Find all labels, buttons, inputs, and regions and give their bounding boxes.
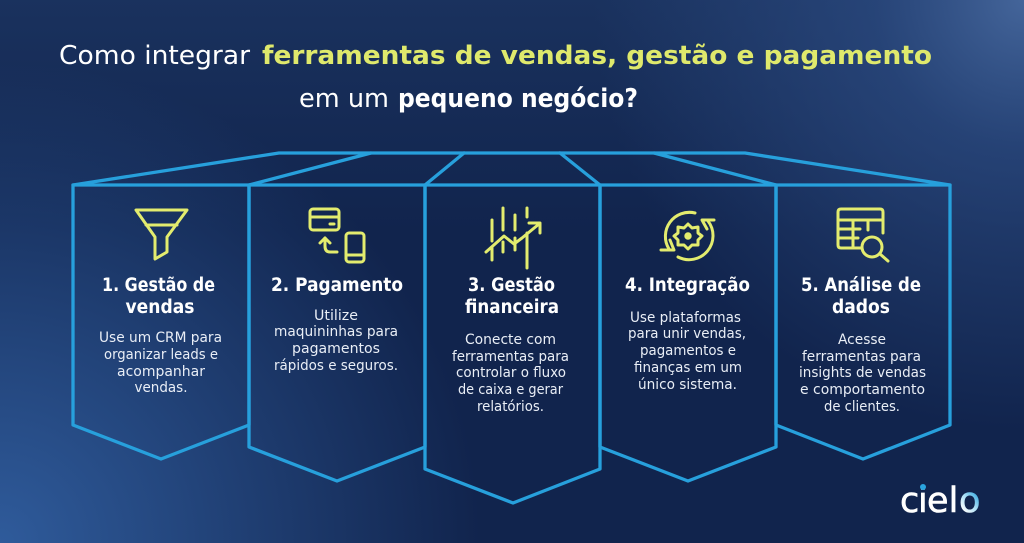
icon: sync gear <box>661 212 714 260</box>
heading: 1: vendas <box>126 297 194 318</box>
text: 5: Acesse <box>838 332 886 348</box>
heading: 5: dados <box>832 297 890 318</box>
text: 2: rápidos e seguros. <box>274 358 398 374</box>
heading: 4: 4. Integração <box>625 275 750 296</box>
text: 5: ferramentas para <box>802 349 921 365</box>
icon: card and phone <box>310 209 364 262</box>
title: em um <box>299 84 389 114</box>
heading: 3: financeira <box>465 297 559 318</box>
title: pequeno negócio? <box>398 84 638 114</box>
panel: 2 Pagamento <box>249 185 425 481</box>
text: 3: ferramentas para <box>452 349 569 365</box>
heading: 2: 2. Pagamento <box>271 275 403 296</box>
heading: 5 <box>801 275 921 318</box>
title: ferramentas de vendas, gestão e pagamento <box>262 41 932 71</box>
text: 3: relatórios. <box>477 399 544 415</box>
text: 5: de clientes. <box>824 399 900 415</box>
text: 1: organizar leads e <box>104 347 218 363</box>
text: 4: pagamentos e <box>640 343 736 359</box>
text: 1 <box>99 330 222 396</box>
text: 2: Utilize <box>314 308 358 324</box>
text: 5: insights de vendas <box>799 365 926 381</box>
icon: funnel <box>136 210 187 259</box>
roof outline connecting the five columns <box>73 153 950 185</box>
text: 3: controlar o fluxo <box>456 365 566 381</box>
text: 2: maquininhas para <box>274 324 398 340</box>
text: 4: único sistema. <box>638 377 737 393</box>
text: 3 <box>452 332 569 415</box>
text: 3: Conecte com <box>465 332 556 348</box>
logo: cielo: o <box>959 481 980 521</box>
text: 2: pagamentos <box>292 341 380 357</box>
text: 5 <box>799 332 926 415</box>
panel: 1 Gestão de vendas <box>73 185 249 459</box>
text: 4 <box>628 310 746 393</box>
text: 1: Use um CRM para <box>99 330 222 346</box>
text: 5: e comportamento <box>800 382 925 398</box>
heading: 1 <box>102 275 215 318</box>
text: 2 <box>274 308 398 374</box>
icon: table and magnifier <box>838 209 888 261</box>
text: 4: para unir vendas, <box>628 326 746 342</box>
title <box>59 41 932 114</box>
title: Como integrar <box>59 41 250 71</box>
text: 1: acompanhar <box>117 364 205 380</box>
text: 4: finanças em um <box>634 360 742 376</box>
panel: 4 Integração <box>600 185 776 481</box>
heading: 5: 5. Análise de <box>801 275 921 296</box>
heading: 3 <box>465 275 559 318</box>
icon: chart with arrow <box>486 208 540 268</box>
text: 1: vendas. <box>134 380 188 396</box>
panel: 3 Gestão financeira <box>425 185 600 503</box>
panel: 5 Análise de dados <box>776 185 950 459</box>
logo: cielo: ciel <box>900 481 958 521</box>
text: 3: de caixa e gerar <box>458 382 563 398</box>
heading: 3: 3. Gestão <box>468 275 555 296</box>
heading: 1: 1. Gestão de <box>102 275 215 296</box>
text: 4: Use plataformas <box>630 310 741 326</box>
